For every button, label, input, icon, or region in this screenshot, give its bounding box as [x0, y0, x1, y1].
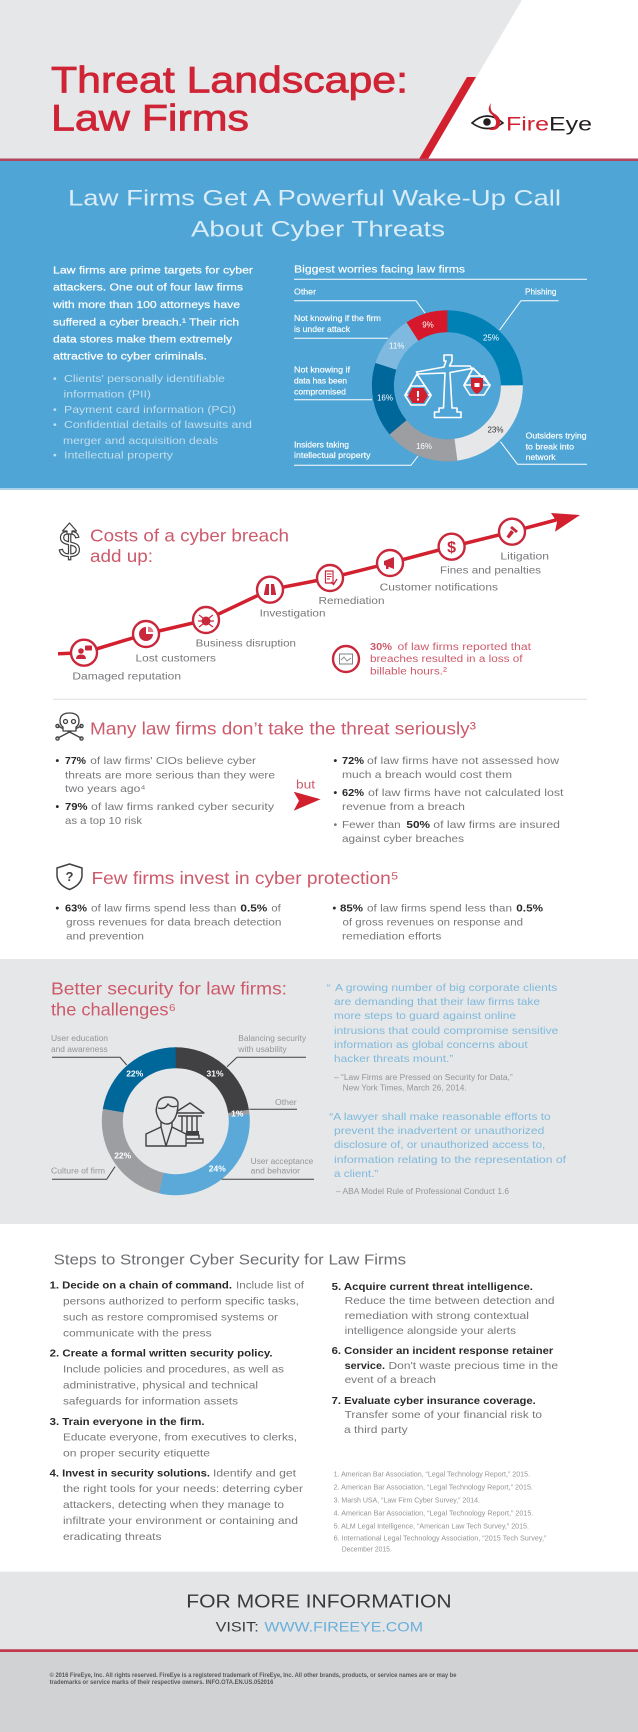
text: right stat: 0.5%	[516, 902, 544, 914]
donut percentages: 22%	[114, 1150, 132, 1160]
text: right column: •	[334, 819, 338, 831]
donut percentages	[114, 1069, 244, 1174]
quote: New York Times: are demanding that their law firms take	[334, 996, 540, 1008]
callout labels: and awareness	[51, 1045, 108, 1054]
header rule	[0, 158, 638, 161]
intro paragraph: attractive to cyber criminals.	[53, 350, 207, 362]
subtitle: Law Firms Get A Powerful Wake-Up Call	[68, 186, 561, 211]
steps: left column: 3. Train everyone in the firm.	[50, 1416, 205, 1428]
intro paragraph: with more than 100 attorneys have	[52, 299, 240, 311]
text: left stat: 63%	[65, 902, 88, 914]
bullet list: Clients' personally identifiable	[64, 373, 225, 385]
steps: left column: attackers, detecting when they manage to	[63, 1499, 284, 1511]
steps: right column: event of a breach	[345, 1374, 436, 1386]
text: right column: 62%	[342, 787, 365, 799]
bullet list	[53, 373, 252, 462]
legal text: © 2016 FireEye, Inc. All rights reserved. FireEye is a registered trademark of FireEye, Inc. All other brands, products, or service names are or may be	[50, 1672, 457, 1679]
citation: – “Law Firms are Pressed on Security for Data,”	[334, 1073, 513, 1082]
milestone labels: Damaged reputation	[72, 670, 181, 682]
steps: left column: on proper security etiquette	[63, 1448, 210, 1460]
callout labels: Not knowing if	[294, 364, 351, 374]
quote: New York Times: more steps to guard against online	[334, 1010, 516, 1022]
subtitle: About Cyber Threats	[191, 217, 445, 242]
quote: New York Times: A growing number of big corporate clients	[335, 982, 557, 994]
quote: ABA rule: prevent the inadvertent or unauthorized	[334, 1125, 544, 1137]
text: left stat: gross revenues for data breach detection	[66, 916, 282, 928]
panel: better security challenges	[0, 959, 638, 1224]
panel: costs of a cyber breach	[53, 513, 587, 699]
text: right stat	[332, 902, 544, 942]
steps: right column: remediation with strong contextual	[345, 1310, 529, 1322]
donut percentages	[377, 321, 504, 451]
steps: right column: Reduce the time between detection and	[345, 1295, 555, 1307]
steps: left column: administrative, physical and technical	[63, 1380, 258, 1392]
steps: left column: eradicating threats	[63, 1531, 162, 1543]
callout labels: Outsiders trying	[526, 431, 587, 441]
panel: for more information	[0, 1572, 638, 1650]
intro paragraph: suffered a cyber breach.¹ Their rich	[53, 316, 239, 328]
legal text	[50, 1672, 457, 1686]
footnotes: 1. American Bar Association, “Legal Technology Report,” 2015.	[334, 1470, 530, 1479]
text: right stat: remediation efforts	[342, 930, 441, 942]
text: right stat: of law firms spend less than	[367, 902, 512, 914]
text: left column: 79%	[65, 801, 88, 813]
text: left stat: and prevention	[66, 930, 144, 942]
donut ring	[99, 1045, 252, 1198]
heading: Many law firms don’t take the threat seriously³	[90, 718, 476, 738]
callout: billable hours	[333, 642, 531, 678]
heading: the challenges⁶	[51, 1000, 176, 1020]
donut percentages: 24%	[209, 1164, 226, 1174]
text: right column	[334, 755, 564, 845]
title	[51, 60, 408, 139]
footnotes: December 2015.	[342, 1545, 392, 1554]
panel: blue intro	[0, 161, 638, 490]
steps: right column: 5. Acquire current threat intelligence.	[332, 1281, 533, 1293]
bullet list: •	[53, 419, 57, 431]
text: right column: Fewer than	[342, 819, 401, 831]
chart title: Biggest worries facing law firms	[294, 264, 465, 276]
steps: left column: such as restore compromised systems or	[63, 1312, 279, 1324]
steps: right column: intelligence alongside your alerts	[345, 1325, 516, 1337]
quote: New York Times: “	[327, 982, 331, 994]
steps: left column: Identify and get	[213, 1468, 296, 1480]
steps: left column: safeguards for information assets	[63, 1396, 238, 1408]
callout labels: intellectual property	[294, 450, 371, 460]
website: VISIT:	[216, 1619, 259, 1635]
steps: right column: 7. Evaluate cyber insurance coverage.	[332, 1395, 536, 1407]
quote: New York Times: information as global concerns about	[334, 1039, 528, 1051]
steps: left column: Include policies and procedures, as well as	[63, 1364, 284, 1376]
steps: right column	[332, 1281, 558, 1436]
milestone labels	[72, 551, 549, 682]
icon: dollar arrow: $	[59, 524, 80, 566]
heading: Steps to Stronger Cyber Security for Law Firms	[54, 1251, 406, 1268]
intro paragraph: Law firms are prime targets for cyber	[53, 264, 254, 276]
text: left column	[56, 755, 275, 827]
heading: Better security for law firms:	[51, 978, 287, 998]
website: WWW.FIREEYE.COM	[264, 1619, 423, 1635]
text: left stat	[56, 902, 282, 942]
heading: FOR MORE INFORMATION	[186, 1592, 452, 1612]
red slanted stripe	[419, 77, 476, 159]
milestone labels: Lost customers	[136, 652, 216, 664]
text: left column: 77%	[65, 755, 87, 767]
quote: New York Times: hacker threats mount.”	[334, 1053, 454, 1065]
bullet list: merger and acquisition deals	[63, 435, 218, 447]
text: right column: of law firms have not assessed how	[367, 755, 559, 767]
milestone labels: Litigation	[500, 551, 549, 563]
callout labels: Not knowing if the firm	[294, 313, 381, 323]
heading: add up:	[90, 546, 153, 566]
icon: scales	[405, 355, 490, 418]
panel: footer legal	[0, 1649, 638, 1732]
text: left column: two years ago⁴	[65, 783, 146, 795]
icon: lawyer and courthouse	[146, 1097, 204, 1146]
text: right stat: •	[332, 902, 336, 914]
callout labels: User education	[51, 1034, 108, 1043]
donut percentages: 1%	[231, 1109, 244, 1119]
quote: ABA rule	[329, 1111, 566, 1196]
text: left column: as a top 10 risk	[65, 815, 143, 827]
steps: right column: a third party	[344, 1424, 408, 1436]
citation: – ABA Model Rule of Professional Conduct 1.6	[336, 1187, 510, 1196]
FireEye logo	[472, 103, 592, 136]
glyphs inside milestones	[76, 526, 518, 659]
donut percentages: 11%	[389, 342, 404, 351]
milestone labels: Business disruption	[196, 638, 296, 650]
milestone icons	[71, 519, 525, 666]
steps: left column: communicate with the press	[63, 1328, 212, 1340]
text: right column: much a breach would cost them	[342, 769, 512, 781]
text: right stat: 85%	[340, 902, 364, 914]
text: right column: of law firms have not calculated lost	[368, 787, 564, 799]
callout labels: Insiders taking	[294, 439, 349, 449]
steps: right column: 6. Consider an incident response retainer	[332, 1345, 553, 1357]
icon: shield question	[57, 864, 82, 890]
heading: Few firms invest in cyber protection⁵	[92, 868, 399, 888]
bullet list: •	[53, 450, 57, 462]
steps: left column	[50, 1280, 304, 1543]
intro paragraph: data stores make them extremely	[53, 333, 233, 345]
icon: skull	[56, 713, 83, 740]
text: right column: •	[334, 755, 338, 767]
bullet list: •	[53, 404, 57, 416]
callout labels: with usability	[237, 1045, 287, 1054]
text: right column: 50%	[406, 819, 431, 831]
text: right column: 72%	[342, 755, 365, 767]
quote: ABA rule: “A lawyer shall make reasonable efforts to	[329, 1111, 551, 1123]
bullet list: Payment card information (PCI)	[64, 404, 236, 416]
heading	[51, 978, 287, 1020]
milestone labels: Customer notifications	[380, 582, 498, 594]
callout text: of law firms reported that	[398, 642, 531, 653]
text: left column: of law firms' CIOs believe cyber	[90, 755, 257, 767]
donut percentages: 16%	[377, 394, 393, 403]
citation	[334, 1073, 513, 1093]
steps: right column: Don't waste precious time in the	[388, 1360, 558, 1372]
quote: ABA rule: information relating to the representation of	[334, 1154, 566, 1166]
callout lines	[294, 301, 587, 465]
callout labels: Phishing	[525, 286, 557, 296]
text: left column: •	[56, 801, 60, 813]
text: right column: revenue from a breach	[342, 801, 465, 813]
callout labels: network	[526, 452, 556, 462]
icon: shield question: ?	[66, 869, 74, 884]
steps: left column: 4. Invest in security solutions.	[50, 1468, 210, 1480]
donut percentages: 31%	[206, 1069, 224, 1079]
quote: ABA rule: a client.”	[334, 1168, 379, 1180]
footnotes: 6. International Legal Technology Association, “2015 Tech Survey,”	[334, 1534, 547, 1543]
callout labels: Other	[275, 1098, 297, 1107]
steps: left column: the right tools for your needs: deterring cyber	[63, 1483, 304, 1495]
callout labels: compromised	[294, 386, 346, 396]
milestone labels: Fines and penalties	[440, 565, 541, 577]
steps: left column: 1. Decide on a chain of command.	[50, 1280, 232, 1292]
text: right column: of law firms are insured	[433, 819, 560, 831]
callout labels: Balancing security	[238, 1034, 306, 1043]
but arrow	[294, 779, 321, 811]
callout labels: to break into	[526, 441, 574, 451]
title: Law Firms	[51, 98, 249, 139]
callout text: breaches resulted in a loss of	[370, 654, 523, 665]
heading: Costs of a cyber breach	[90, 526, 289, 546]
donut percentages: 22%	[126, 1069, 144, 1079]
steps: right column: service.	[345, 1360, 385, 1372]
callout labels	[294, 286, 587, 462]
heading	[90, 526, 289, 566]
legal text: trademarks or service marks of their respective owners. INFO.OTA.EN.US.052016	[50, 1680, 274, 1686]
intro paragraph	[52, 264, 254, 362]
text: right column: against cyber breaches	[342, 833, 464, 845]
panel: few firms invest	[56, 864, 544, 942]
FireEye logo: Fire Eye	[506, 115, 592, 136]
donut ring	[357, 295, 538, 477]
glyphs inside milestones: $	[447, 540, 456, 556]
donut percentages: 9%	[422, 321, 434, 330]
chart: biggest worries	[294, 264, 587, 477]
steps: left column: infiltrate your environment or containing and	[63, 1515, 298, 1527]
bullet list: Intellectual property	[64, 450, 174, 462]
steps: left column: Include list of	[236, 1280, 304, 1292]
but arrow: but	[296, 779, 316, 791]
callout labels	[51, 1034, 314, 1176]
milestone labels: Investigation	[260, 608, 326, 620]
steps: right column: Transfer some of your financial risk to	[345, 1409, 542, 1421]
text: right stat: of gross revenues on response and	[342, 916, 523, 928]
text: left stat: 0.5%	[240, 902, 268, 914]
callout labels: Culture of firm	[51, 1167, 105, 1176]
quote: New York Times: intrusions that could compromise sensitive	[334, 1025, 558, 1037]
footnotes: 4. American Bar Association, “Legal Technology Report,” 2015.	[334, 1509, 533, 1518]
callout labels: is under attack	[294, 324, 351, 334]
panel: header	[0, 0, 638, 161]
footnotes	[334, 1470, 547, 1554]
quote: New York Times	[327, 982, 558, 1093]
text: left stat: •	[56, 902, 60, 914]
text: left stat: of law firms spend less than	[91, 902, 237, 914]
callout text	[370, 642, 531, 678]
donut percentages: 25%	[483, 334, 499, 343]
text: left column: •	[56, 755, 60, 767]
panel: threat seriousness	[56, 713, 564, 845]
icon: monitor chart	[333, 646, 359, 672]
donut percentages: 23%	[487, 426, 504, 435]
chart: challenges donut	[51, 1034, 314, 1198]
bullet list: Confidential details of lawsuits and	[64, 419, 252, 431]
citation: New York Times, March 26, 2014.	[343, 1084, 467, 1093]
bullet list: •	[53, 373, 57, 385]
intro paragraph: attackers. One out of four law firms	[53, 282, 243, 294]
callout labels: and behavior	[251, 1167, 300, 1176]
callout lines	[52, 1057, 314, 1179]
donut percentages: 16%	[416, 442, 432, 451]
quote: ABA rule: disclosure of, or unauthorized access to,	[334, 1139, 545, 1151]
rising arrow line	[58, 513, 580, 654]
text: left column: threats are more serious than they were	[65, 769, 275, 781]
panel: steps to stronger security	[50, 1251, 558, 1554]
steps: left column: Educate everyone, from executives to clerks,	[63, 1432, 297, 1444]
text: left stat: of	[271, 902, 281, 914]
footnotes: 5. ALM Legal Intelligence, “American Law Tech Survey,” 2015.	[334, 1522, 529, 1531]
callout labels: data has been	[294, 375, 347, 385]
bullet list: information (PII)	[64, 389, 151, 401]
footnotes: 3. Marsh USA, “Law Firm Cyber Survey,” 2014.	[334, 1496, 480, 1505]
text: left column: of law firms ranked cyber security	[91, 801, 275, 813]
website	[216, 1619, 423, 1635]
title: Threat Landscape:	[51, 60, 408, 100]
callout labels: User acceptance	[251, 1157, 314, 1166]
callout labels: Other	[294, 286, 316, 296]
steps: left column: persons authorized to perform specific tasks,	[63, 1296, 299, 1308]
footnotes: 2. American Bar Association, “Legal Technology Report,” 2015.	[334, 1483, 533, 1492]
subtitle	[68, 186, 561, 242]
text: right column: •	[334, 787, 338, 799]
steps: left column: 2. Create a formal written security policy.	[50, 1348, 273, 1360]
milestone labels: Remediation	[318, 595, 385, 607]
callout text: 30%	[370, 642, 392, 653]
callout text: billable hours.²	[370, 667, 448, 678]
